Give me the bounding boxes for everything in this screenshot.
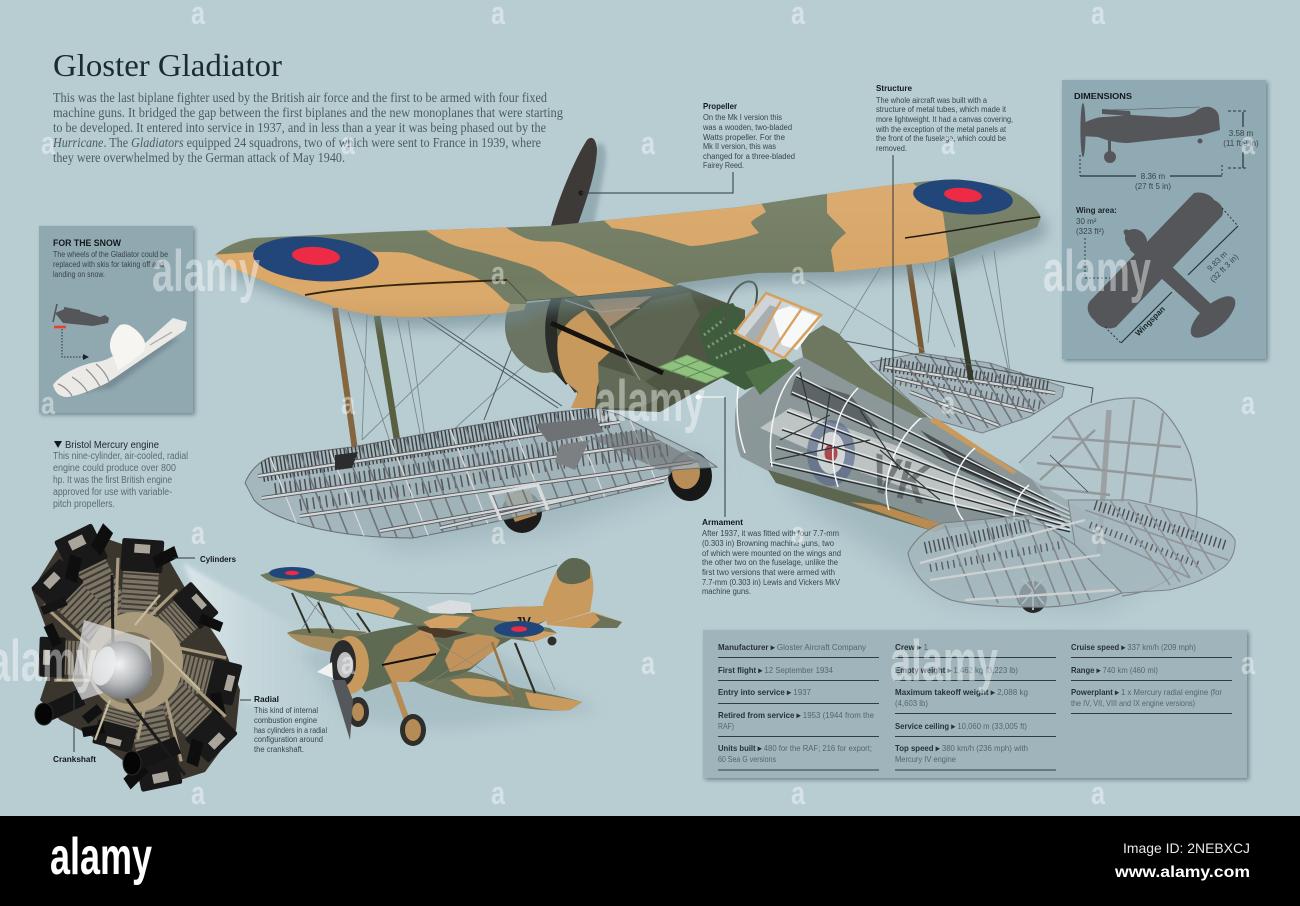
- spec column 3: Range ▸ 740 km (460 mi): [1071, 665, 1158, 675]
- intro text block: they were overwhelmed by the German attack of May 1940.: [53, 150, 345, 165]
- canopy: [427, 600, 472, 613]
- snow text: landing on snow.: [53, 270, 105, 279]
- main aircraft cutaway: [200, 138, 1235, 613]
- icon: ski: [53, 318, 187, 397]
- roundel right: [912, 176, 1014, 218]
- panel: specifications: [703, 630, 1249, 780]
- callout: armament: the other two on the fuselage, unlike the: [702, 558, 839, 567]
- fuselage roundel: [807, 420, 855, 486]
- watermark layer: alamy: [1043, 239, 1151, 304]
- watermark layer: a: [1091, 515, 1105, 551]
- squadron letters: JV: [515, 614, 531, 629]
- panel: for the snow: [39, 226, 195, 415]
- spec column 2: Maximum takeoff weight ▸ 2,088 kg: [895, 687, 1028, 697]
- spec column 1: First flight ▸ 12 September 1934: [718, 665, 833, 675]
- wingspan dimension: Wingspan: [1134, 304, 1167, 338]
- callout: propeller: Fairey Reed.: [703, 161, 744, 170]
- callout: propeller: was a wooden, two-bladed: [702, 123, 792, 132]
- struts: [292, 593, 370, 633]
- watermark layer: a: [191, 515, 205, 551]
- snow text: The wheels of the Gladiator could be: [53, 250, 168, 259]
- footer logo: alamy: [50, 828, 152, 886]
- wingspan dimension: 9.83 m: [1205, 249, 1229, 273]
- upper wing: [260, 569, 557, 642]
- watermark layer: a: [1091, 775, 1105, 811]
- height dimension: [1223, 111, 1259, 168]
- callout: propeller: Propeller: [703, 102, 738, 111]
- callout: radial: configuration around: [254, 735, 323, 744]
- spec column 1: Retired from service ▸ 1953 (1944 from the: [718, 710, 874, 720]
- watermark layer: a: [341, 125, 355, 161]
- watermark layer: a: [791, 255, 805, 291]
- callout: armament: Armament: [702, 518, 743, 527]
- watermark layer: alamy: [890, 629, 998, 694]
- intro text block: to be developed. It entered into service in 1937, and in less than a year it was being phased out by the: [53, 120, 546, 135]
- propeller: [317, 662, 353, 740]
- image id: Image ID: 2NEBXCJ: [1123, 840, 1250, 856]
- watermark layer: a: [941, 385, 955, 421]
- spec column 2: [895, 642, 1056, 770]
- spec column 1: 60 Sea G versions: [718, 754, 776, 764]
- watermark layer: a: [1241, 385, 1255, 421]
- far tailplane skeleton: [1068, 500, 1235, 593]
- wing area: 30 m²: [1076, 217, 1097, 226]
- heading: for the snow: FOR THE SNOW: [53, 238, 121, 248]
- watermark layer: a: [491, 515, 505, 551]
- watermark layer: a: [41, 125, 55, 161]
- watermark layer: a: [641, 645, 655, 681]
- aileron line right: [905, 217, 1040, 238]
- callout: armament: After 1937, it was fitted with four 7.7-mm: [702, 529, 839, 538]
- spec column 2: Service ceiling ▸ 10,060 m (33,005 ft): [895, 721, 1027, 731]
- lower wing skeleton: [244, 408, 718, 538]
- spec column 2: Top speed ▸ 380 km/h (236 mph) with: [895, 743, 1028, 753]
- watermark layer: a: [191, 775, 205, 811]
- text block: bristol mercury engine: This nine-cylinder, air-cooled, radial: [53, 451, 188, 462]
- tail wheel: [1019, 575, 1047, 613]
- text block: bristol mercury engine: [53, 439, 188, 510]
- height dimension: (11 ft 9 in): [1223, 139, 1259, 148]
- wingspan dimension: (32 ft 3 in): [1208, 252, 1240, 284]
- far lower wing skeleton: [870, 353, 1064, 433]
- text block: bristol mercury engine: approved for use with variable-: [53, 487, 172, 498]
- text block: bristol mercury engine: hp. It was the first British engine: [53, 475, 172, 486]
- watermark layer: a: [41, 385, 55, 421]
- spec column 1: [718, 642, 879, 770]
- front interplane struts: [335, 308, 403, 477]
- wheel: near landing gear: [502, 490, 542, 533]
- rear fuselage decking: [800, 325, 928, 418]
- wing area: [1076, 206, 1117, 278]
- length dimension: [1080, 155, 1222, 191]
- intro text block: This was the last biplane fighter used by the British air force and the first to be armed with four fixed: [53, 90, 547, 105]
- label: cylinders: Cylinders: [200, 555, 236, 564]
- length dimension: (27 ft 5 in): [1135, 182, 1171, 191]
- spec column 2: Mercury IV engine: [895, 754, 956, 764]
- callout: propeller: Mk II version, this was: [703, 142, 776, 151]
- callout: propeller: changed for a three-bladed: [703, 152, 795, 161]
- main gear: [393, 682, 426, 746]
- wing area: Wing area:: [1076, 206, 1117, 215]
- callout: armament: of which were mounted on the wings and: [702, 549, 841, 558]
- website: www.alamy.com: [1114, 864, 1250, 881]
- watermark layer: a: [341, 645, 355, 681]
- snow text: replaced with skis for taking off and: [53, 260, 164, 269]
- text block: bristol mercury engine: Bristol Mercury engine: [65, 439, 159, 451]
- label: crankshaft: [53, 693, 96, 764]
- callout: propeller: [581, 102, 795, 193]
- near lower wing: [407, 669, 582, 710]
- small complete aircraft: [260, 558, 622, 746]
- callout: structure: removed.: [876, 144, 907, 153]
- callout: radial: Radial: [254, 695, 279, 704]
- watermark layer: alamy: [595, 369, 705, 434]
- callout: structure: [875, 84, 1013, 440]
- callout: radial: This kind of internal: [254, 706, 318, 715]
- callout: armament: (0.303 in) Browning machine guns, two: [702, 539, 835, 548]
- callout: structure: with the exception of the metal panels at: [875, 125, 1007, 134]
- watermark layer: a: [641, 125, 655, 161]
- watermark layer: a: [791, 515, 805, 551]
- exhaust tubes: [35, 601, 178, 775]
- callout: structure: the front of the fuselage, which could be: [876, 134, 1006, 143]
- fuselage cutaway skeleton: [735, 350, 1100, 537]
- spec column 1: Manufacturer ▸ Gloster Aircraft Company: [718, 642, 867, 652]
- callout: armament: machine guns.: [702, 587, 751, 596]
- callout: propeller: Watts propeller. For the: [703, 133, 786, 142]
- green access panel: [659, 355, 729, 383]
- spec column 3: the IV, VII, VIII and IX engine versions): [1071, 698, 1195, 708]
- wing area: (323 ft²): [1076, 227, 1104, 236]
- tail fin skeleton: [1019, 398, 1197, 596]
- watermark layer: a: [341, 385, 355, 421]
- text block: bristol mercury engine: pitch propellers.: [53, 499, 115, 510]
- label: cylinders: [173, 555, 236, 564]
- watermark layer: a: [491, 255, 505, 291]
- icon: top silhouette: [1088, 193, 1242, 345]
- soft ground shadow: [300, 420, 1180, 610]
- icon: propeller blade: [551, 138, 606, 235]
- wheel: far landing gear: [668, 451, 712, 501]
- callout: armament: first two versions that were armed with: [702, 568, 835, 577]
- right struts: [492, 642, 513, 700]
- callout: armament: 7.7-mm (0.303 in) Lewis and Vickers MkV: [702, 578, 841, 587]
- callout: structure: Structure: [876, 84, 912, 93]
- wingspan dimension: [1105, 208, 1240, 343]
- callout: radial: [240, 695, 327, 754]
- icon: side silhouette: [1080, 103, 1220, 163]
- roundel left: [252, 233, 380, 285]
- far wheel: [347, 697, 369, 727]
- footer bar: [0, 816, 1300, 906]
- aileron line left: [305, 280, 507, 295]
- watermark layer: a: [491, 775, 505, 811]
- watermark layer: a: [1241, 125, 1255, 161]
- watermark layer: a: [1241, 645, 1255, 681]
- crankcase: [87, 612, 183, 712]
- spec column 2: (4,603 lb): [895, 698, 928, 708]
- intro text block: Hurricane. The Gladiators equipped 24 squadrons, two of which were sent to France in 1939, where: [52, 135, 541, 150]
- rigging wires: [348, 250, 1093, 493]
- callout: radial: the crankshaft.: [254, 745, 304, 754]
- push rods: [112, 575, 185, 775]
- spec column 1: Entry into service ▸ 1937: [718, 687, 811, 697]
- heading: dimensions: DIMENSIONS: [1074, 91, 1132, 101]
- callout: armament: [696, 394, 841, 596]
- callout: propeller: On the Mk I version this: [703, 113, 782, 122]
- panel: dimensions: [1062, 80, 1268, 361]
- silver propeller hub: [72, 620, 152, 700]
- callout: structure: structure of metal tubes, which made it: [876, 105, 1007, 114]
- watermark layer: a: [791, 775, 805, 811]
- cowling and front fuselage: [505, 285, 745, 412]
- title: Gloster Gladiator: [53, 47, 282, 83]
- engine illustration: [28, 518, 243, 795]
- length dimension: 8.36 m: [1141, 172, 1166, 181]
- small roundels: [269, 567, 544, 637]
- callout: structure: more lightweight. It had a canvas covering,: [876, 115, 1013, 124]
- watermark layer: alamy: [152, 239, 260, 304]
- spec column 2: Empty weight ▸ 1,462 kg (3,223 lb): [895, 665, 1018, 675]
- icon: small plane with ski: [53, 304, 109, 360]
- intro text block: machine guns. It bridged the gap between the first biplanes and the new monoplanes that were starting: [53, 105, 563, 120]
- light beam from engine to small plane: [183, 563, 335, 745]
- callout: structure: The whole aircraft was built with a: [876, 96, 987, 105]
- cockpit: [659, 282, 821, 395]
- height dimension: 3.58 m: [1229, 129, 1254, 138]
- fin: [543, 558, 593, 625]
- rear interplane struts: [908, 258, 971, 380]
- engine backdrop: [32, 533, 240, 787]
- callout: radial: has cylinders in a radial: [254, 726, 327, 735]
- squadron letters: VK: [864, 443, 935, 516]
- upper wing: [200, 170, 1060, 330]
- spec column 3: Powerplant ▸ 1 x Mercury radial engine (for: [1071, 687, 1222, 697]
- snow text: [53, 250, 168, 279]
- tailplane: [547, 612, 622, 628]
- watermark layer: a: [941, 125, 955, 161]
- spec column 2: Crew ▸ 1: [895, 642, 928, 652]
- intro text block: [52, 90, 563, 165]
- text block: bristol mercury engine: engine could produce over 800: [53, 463, 176, 474]
- cowling ring: [330, 636, 369, 694]
- near tailplane skeleton: [908, 515, 1122, 607]
- callout: radial: combustion engine: [254, 716, 318, 725]
- far lower wing: [287, 628, 367, 652]
- spec column 3: [1071, 642, 1232, 714]
- spec column 1: Units built ▸ 480 for the RAF; 216 for export;: [718, 743, 872, 753]
- spec column 1: RAF): [718, 721, 734, 731]
- spec column 3: Cruise speed ▸ 337 km/h (209 mph): [1071, 642, 1196, 652]
- label: crankshaft: Crankshaft: [53, 755, 96, 764]
- fuselage: [345, 606, 552, 692]
